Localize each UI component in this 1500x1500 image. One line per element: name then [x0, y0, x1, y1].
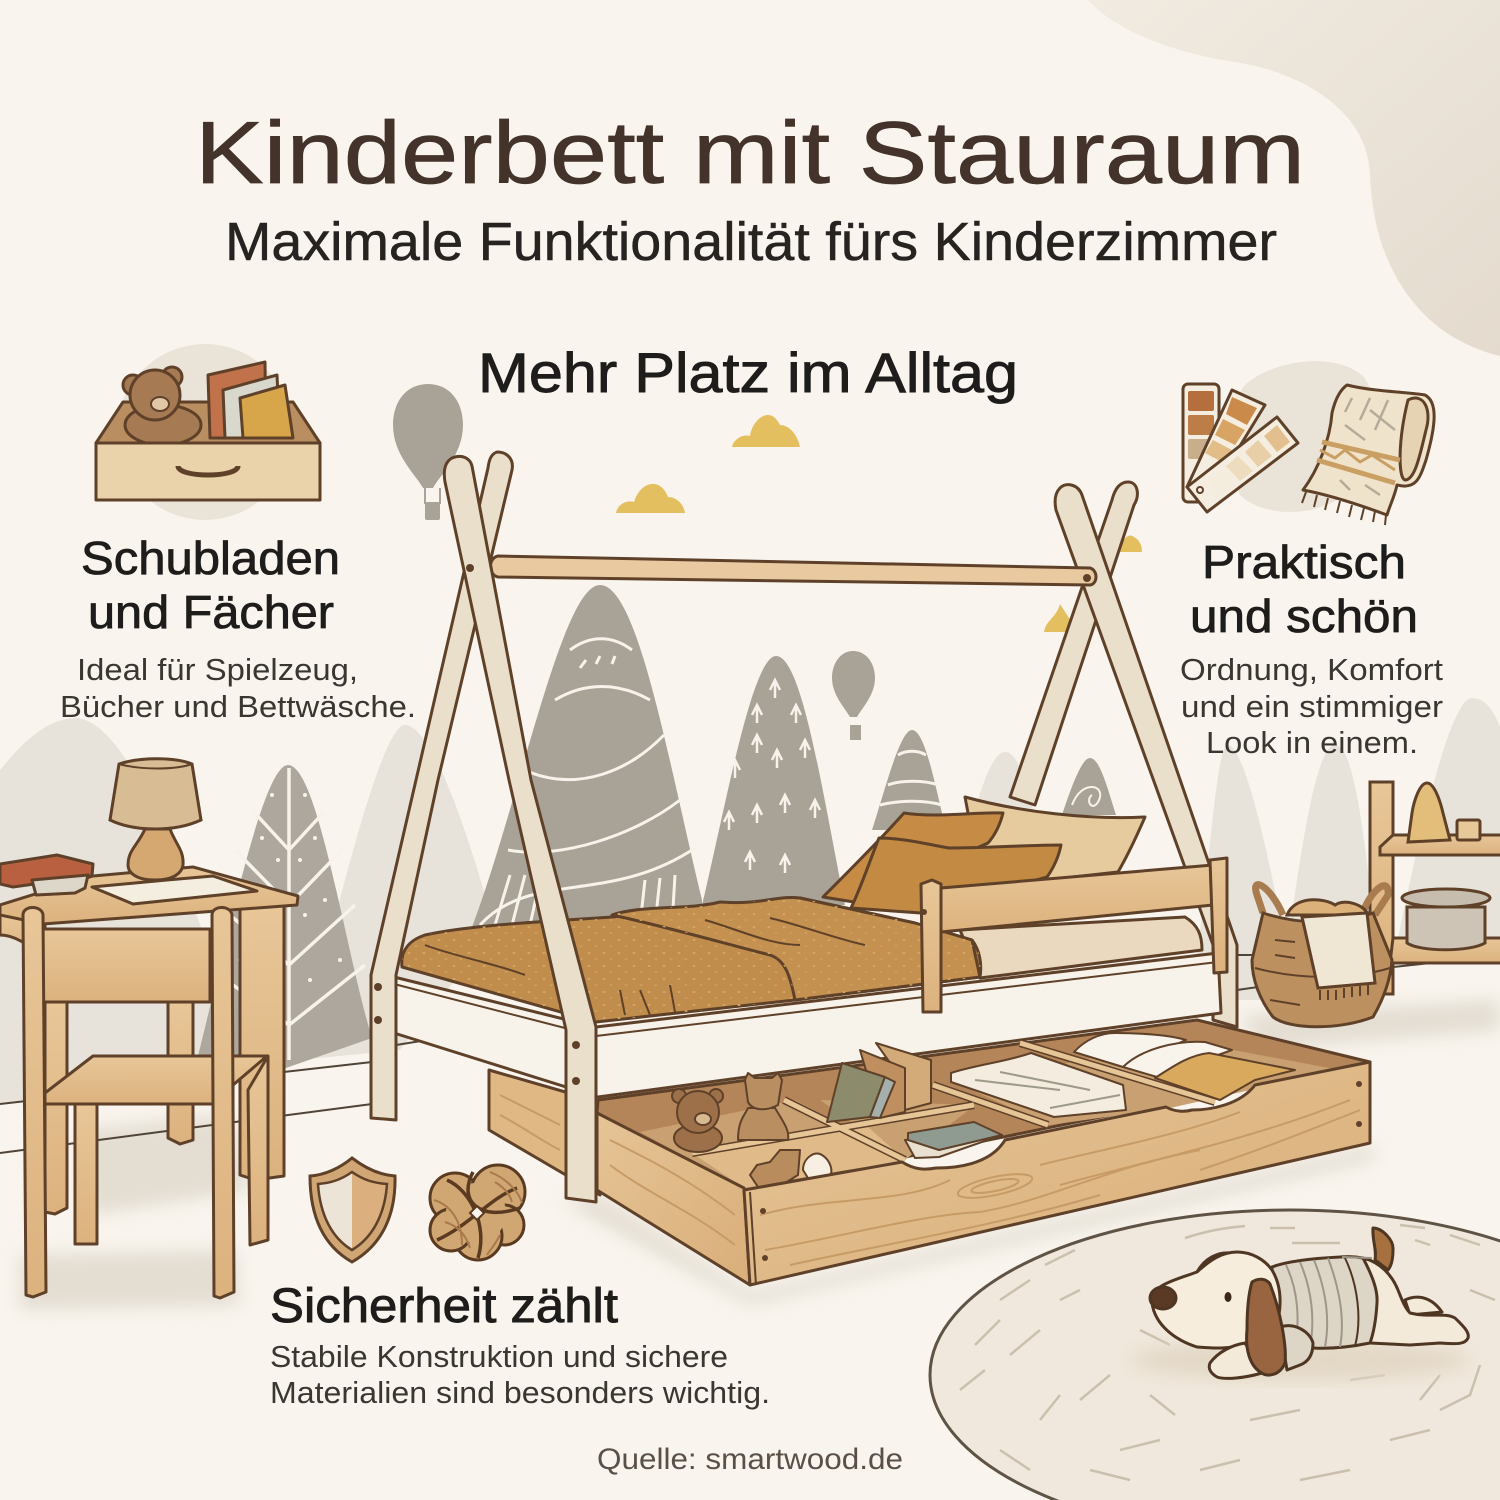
lamp: shade [110, 759, 201, 829]
drawer: front edge [750, 1192, 756, 1285]
section heading: Mehr Platz im Alltag [478, 341, 1018, 404]
text: Sicherheit description [270, 1339, 770, 1410]
desk: stones [32, 875, 88, 895]
storage drawer [489, 1020, 1370, 1285]
drawer: front panel [744, 1062, 1370, 1285]
heading: Praktisch und schön: Praktisch [1202, 536, 1406, 588]
bed: pale mattress [960, 917, 1202, 978]
text: Schubladen description: Ideal für Spielzeug, [77, 652, 358, 687]
background blob top right [1088, 0, 1500, 356]
drawer front [96, 443, 320, 500]
icon: swatches and blanket [1183, 361, 1434, 525]
swatch 2 [1187, 390, 1265, 495]
clouds [616, 415, 1142, 632]
dog: paw [1209, 1343, 1262, 1378]
text: Schubladen description: Bücher und Bettwäsche. [60, 689, 416, 724]
drawer: book stack [905, 1122, 1002, 1158]
drawer: books [827, 1043, 931, 1122]
basket: towel [1302, 913, 1375, 988]
blanket [1303, 385, 1434, 515]
basket [1252, 885, 1392, 1027]
desk: red book [0, 855, 93, 887]
heading: Praktisch und schön [1190, 536, 1418, 642]
subtitle: Maximale Funktionalität fürs Kinderzimmer [225, 212, 1277, 272]
wall mural: pale mountains [0, 698, 1500, 1104]
round rug [930, 1210, 1500, 1500]
text: Sicherheit description: Stabile Konstruktion und sichere [270, 1339, 728, 1374]
title: Kinderbett mit Stauraum [195, 103, 1305, 202]
mountain: small striped [872, 730, 946, 830]
drawer: small toys [750, 1150, 831, 1190]
shelf right [1370, 782, 1500, 994]
bed: guard rail [921, 858, 1227, 1012]
desk: apron [0, 915, 45, 960]
dog: tail [1373, 1228, 1393, 1270]
drawer: front bolts [760, 1081, 1362, 1261]
icon: wooden knot [430, 1165, 525, 1260]
bed: orange pillow front [851, 838, 1061, 913]
bed [394, 482, 1237, 1097]
wall mural: grey mountains [195, 585, 1116, 1069]
books [208, 362, 266, 438]
dog: back leg [1405, 1297, 1442, 1315]
drawer: folded linen [951, 1053, 1126, 1117]
bed: bolts [374, 564, 1091, 1085]
drawer: wood grain [500, 1095, 1360, 1265]
drawer: teddy bears [672, 1073, 788, 1152]
drawer: compartment floors [640, 1040, 1340, 1190]
heading: Schubladen und Fächer [81, 532, 340, 638]
bed: white base [394, 953, 1221, 1097]
dog: back ear [1197, 1253, 1230, 1272]
icon: drawer with teddy and books [96, 344, 320, 520]
chair [23, 908, 268, 1298]
drawer: dividers [692, 1043, 1215, 1160]
rug: dog shadow [1130, 1340, 1470, 1380]
bed: right A-frame [1010, 482, 1237, 1027]
dog: nose [1150, 1287, 1176, 1309]
dog: front sleeve [1280, 1326, 1313, 1370]
bed: blanket fold [612, 897, 980, 1000]
bed: mattress [402, 898, 981, 1022]
heading: Schubladen und Fächer: Schubladen [81, 532, 340, 584]
inner drawer [96, 402, 320, 443]
drawer: yellow cloth [1155, 1053, 1295, 1100]
text: Praktisch description [1180, 652, 1443, 760]
text: Praktisch description: und ein stimmiger [1181, 689, 1443, 724]
drawer: white pillows [1074, 1033, 1232, 1077]
desk: top [0, 867, 298, 924]
bed: left A-frame [371, 452, 596, 1202]
dog: eye [1224, 1292, 1232, 1302]
dog: head [1152, 1252, 1280, 1348]
drawer: left side [597, 1113, 750, 1285]
dog: ear [1247, 1279, 1285, 1375]
floor lines and shadows [0, 955, 1500, 1310]
desk: legs [240, 905, 284, 1180]
heading: Praktisch und schön: und schön [1190, 590, 1418, 642]
heading: Schubladen und Fächer: und Fächer [88, 586, 334, 638]
text: Schubladen description [60, 652, 416, 724]
icon: shield [310, 1158, 395, 1262]
hot air balloon large [393, 384, 463, 520]
hot air balloon small [832, 651, 875, 740]
mountain: tree pattern [702, 656, 845, 905]
drawer: interior [597, 1020, 1370, 1190]
desk: open book [92, 876, 257, 904]
swatch 3 [1187, 417, 1298, 512]
desk [0, 855, 298, 1214]
shelf: small cube [1457, 820, 1480, 840]
text: Sicherheit description: Materialien sind besonders wichtig. [270, 1375, 770, 1410]
source: Quelle: smartwood.de [597, 1443, 903, 1476]
dog: body rear [1363, 1258, 1468, 1345]
text: Praktisch description: Look in einem. [1206, 725, 1418, 760]
teddy [123, 367, 201, 445]
mountain: small right [1062, 758, 1116, 815]
shelf: grey pot [1407, 907, 1485, 950]
bed: orange pillow back [823, 813, 1003, 902]
drawer: under-bed box [489, 1070, 600, 1195]
mountain: tall centre [472, 585, 702, 930]
dog: sweater [1272, 1257, 1377, 1348]
bed: ridge pole [490, 556, 1096, 585]
lamp [110, 759, 201, 880]
lamp: base [128, 829, 183, 880]
text: Praktisch description: Ordnung, Komfort [1180, 652, 1443, 687]
mountain: left leaf tree [195, 765, 372, 1069]
bed: pale pillow [965, 797, 1145, 885]
swatch 1 [1183, 384, 1219, 502]
shelf: wooden toy [1408, 783, 1450, 842]
plush dog [1150, 1228, 1468, 1378]
heading: Sicherheit zählt: Sicherheit zählt [270, 1280, 618, 1333]
